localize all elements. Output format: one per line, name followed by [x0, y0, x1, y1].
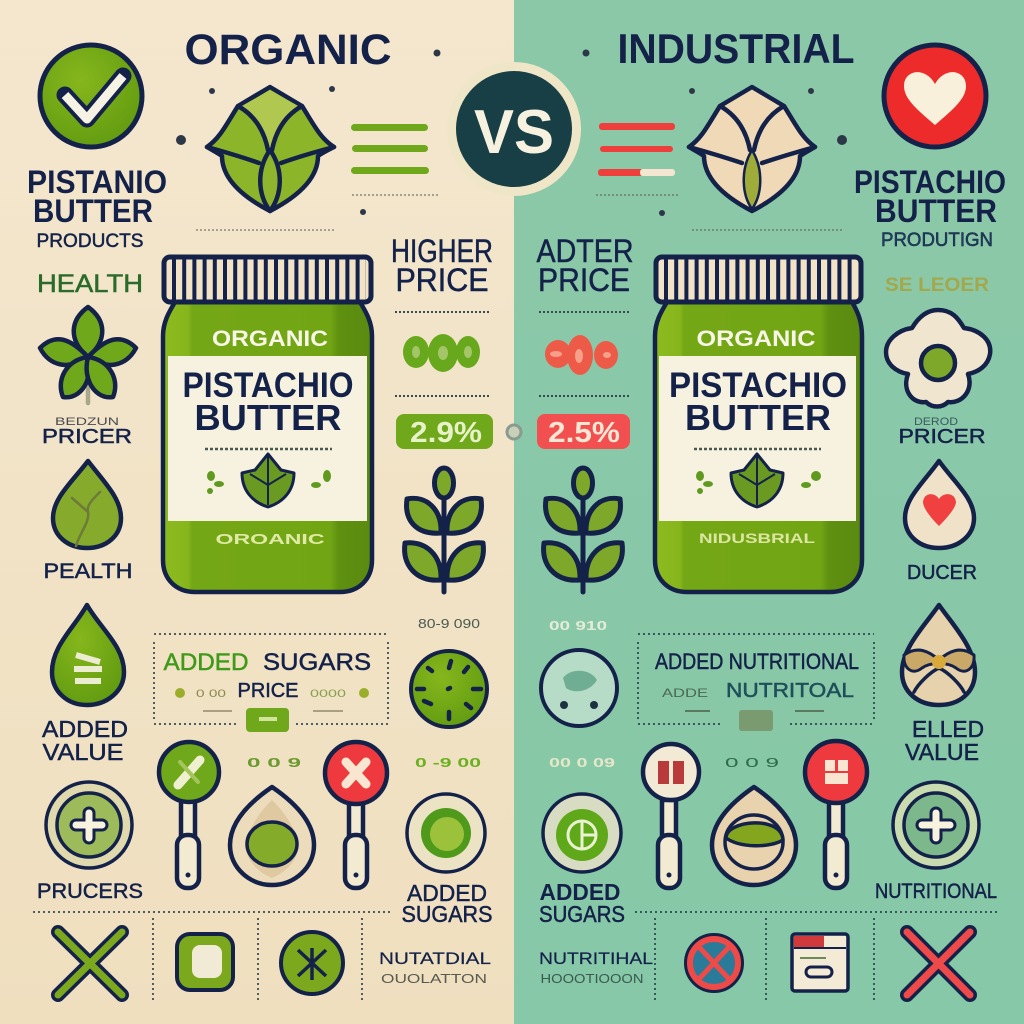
label: added sugars right: SUGARS [539, 901, 625, 927]
icon: cream drop with heart [905, 461, 974, 548]
badge: red percent: 2.5% [548, 417, 620, 449]
jar body [163, 302, 372, 592]
jar product name [182, 366, 354, 438]
label: nutritional bottom right: NUTRITIHAL [539, 949, 653, 968]
label: added value left: ADDED [42, 716, 128, 742]
icon: green crossed circle [281, 932, 343, 994]
badge: green percent [396, 414, 493, 449]
icon: browser card [792, 934, 848, 991]
small text: dotted row left: 0 0 9 [247, 755, 301, 770]
jar product name [669, 366, 847, 438]
badge: red percent [537, 414, 630, 449]
label: elled value right [905, 716, 984, 765]
label: added sugars right [539, 879, 625, 927]
label: pricer left [42, 416, 132, 448]
label: blurred health: SE LEOER [885, 275, 989, 296]
label: added value left: VALUE [42, 739, 124, 765]
icon: organic pistachio leaf [207, 87, 334, 211]
callout: added nutritional: NUTRITOAL [726, 680, 854, 702]
callout: added sugars price: ADDED [164, 649, 248, 676]
equals bars: industrial [598, 123, 675, 176]
badge: green percent: 2.9% [410, 417, 482, 449]
icon: green check badge [40, 45, 142, 147]
jar bottom text: NIDUSBRIAL [699, 530, 816, 546]
label: nutritional bottom right: HOOOTIOOON [540, 971, 644, 986]
icon: cream flower with green centre [886, 310, 990, 406]
heading: pistachio butter production: PISTACHIO [854, 164, 1006, 200]
icon: green cut fruit [411, 651, 487, 727]
label: added sugars left [402, 880, 492, 927]
icon: red dots [545, 335, 618, 375]
label: nutritional bottom right [539, 949, 653, 986]
icon: kiwi target right [543, 794, 621, 872]
icon: centre seed right [712, 787, 796, 885]
callout: added sugars price: 0 00 [196, 688, 226, 700]
jar bottom text: OROANIC [216, 531, 325, 548]
jar product name: PISTACHIO [182, 366, 354, 405]
jar lid [164, 257, 371, 302]
label: prucers: PRUCERS [37, 880, 143, 903]
small text: top of kiwi left: 80-9 090 [418, 616, 480, 631]
label: elled value right: ELLED [912, 716, 984, 742]
icon: green drop left [53, 461, 121, 548]
jar top text: ORGANIC [212, 326, 328, 351]
icon: red heart badge [884, 45, 986, 147]
icon: green dots [403, 334, 480, 372]
icon: kiwi target left [407, 794, 485, 872]
title: industrial: INDUSTRIAL [618, 25, 854, 72]
icon: green cross [58, 932, 122, 995]
label: health: HEALTH [37, 270, 143, 298]
label: nutatdial left: NUTATDIAL [379, 949, 491, 968]
jar leaf emblem [207, 454, 331, 507]
label: nutatdial left: OUOLATTON [381, 971, 487, 986]
VS badge: VS [474, 98, 554, 167]
icon: sprig left [405, 468, 483, 592]
label: nutritional right: NUTRITIONAL [875, 880, 997, 903]
icon: red prohibited [687, 936, 741, 990]
jar: industrial [655, 257, 862, 592]
callout: added sugars price: PRICE [238, 680, 298, 702]
callout: added sugars price: SUGARS [263, 649, 371, 676]
callout: added nutritional: ADDED NUTRITIONAL [655, 649, 859, 674]
callout: added nutritional [638, 634, 874, 731]
label: added value left [42, 716, 128, 765]
icon: green square [177, 934, 233, 990]
icon: industrial pistachio shell [689, 87, 815, 211]
label: pricer right: PRICER [898, 426, 986, 448]
icon: sprig right [544, 468, 622, 592]
label: adter price: ADTER [536, 233, 634, 269]
icon: red magnifier [325, 742, 387, 888]
label: pricer left: PRICER [42, 426, 132, 448]
jar product name: BUTTER [685, 397, 831, 438]
jar body [655, 302, 862, 592]
jar product name: PISTACHIO [669, 366, 847, 405]
icon: green seed drop [52, 605, 124, 705]
jar lid [656, 257, 861, 302]
icon: plus target right [893, 782, 979, 868]
icon: red magnifier right side [805, 741, 867, 888]
icon: cream magnifier right side [643, 744, 699, 888]
callout: added nutritional: ADDE [662, 686, 708, 700]
icon: small centre coin [507, 425, 521, 439]
callout: added sugars price [154, 634, 388, 732]
VS badge [447, 62, 581, 196]
background: industrial side [514, 0, 1024, 1024]
heading: pistanio butter products: PRODUCTS [36, 231, 144, 252]
label: elled value right: VALUE [905, 739, 979, 765]
heading: pistanio butter products: PISTANIO [27, 164, 167, 200]
heading: pistachio butter production: BUTTER [875, 193, 997, 229]
jar product name: BUTTER [194, 397, 342, 438]
label: added sugars left: ADDED [407, 880, 487, 906]
heading: pistanio butter products [27, 164, 167, 252]
heading: pistachio butter production: PRODUTIGN [881, 230, 993, 251]
label: adter price [536, 233, 634, 298]
label: adter price: PRICE [538, 262, 630, 298]
label: higher price [391, 233, 493, 298]
jar label [659, 356, 856, 521]
label: pealth: PEALTH [44, 560, 132, 583]
jar: organic [163, 257, 372, 592]
jar leaf emblem [696, 454, 821, 507]
label: pricer right [898, 416, 986, 448]
label: added sugars left: SUGARS [402, 901, 492, 927]
label: added sugars right: ADDED [540, 879, 620, 905]
small text: dotted row far right: 0 0 9 [725, 755, 779, 770]
jar label [168, 356, 367, 521]
title: organic: ORGANIC [184, 26, 392, 74]
icon: green five-leaf [40, 307, 136, 403]
label: nutatdial left [379, 949, 491, 986]
icon: mint circle with leaf [541, 650, 617, 726]
equals bars: organic [351, 124, 429, 174]
label: ducer: DUCER [907, 562, 977, 584]
icon: centre seed left [230, 787, 314, 885]
icon: green magnifier [159, 742, 219, 888]
heading: pistachio butter production [854, 164, 1006, 251]
icon: plus target left [46, 782, 132, 868]
jar top text: ORGANIC [696, 326, 816, 351]
label: pricer left: BEDZUN [55, 416, 119, 428]
label: pricer right: DEROD [914, 416, 958, 428]
callout: added sugars price: 0000 [310, 688, 346, 700]
small text: top of circle right: 00 910 [549, 618, 607, 633]
background: organic side [0, 0, 514, 1024]
small text: dotted row right: 00 0 09 [549, 755, 615, 770]
icon: red cross [907, 932, 970, 995]
icon: cream seed [902, 605, 975, 705]
label: higher price: PRICE [396, 262, 488, 298]
heading: pistanio butter products: BUTTER [33, 193, 153, 229]
small text: dotted row centre: 0 -9 00 [415, 755, 481, 770]
label: higher price: HIGHER [391, 233, 493, 269]
